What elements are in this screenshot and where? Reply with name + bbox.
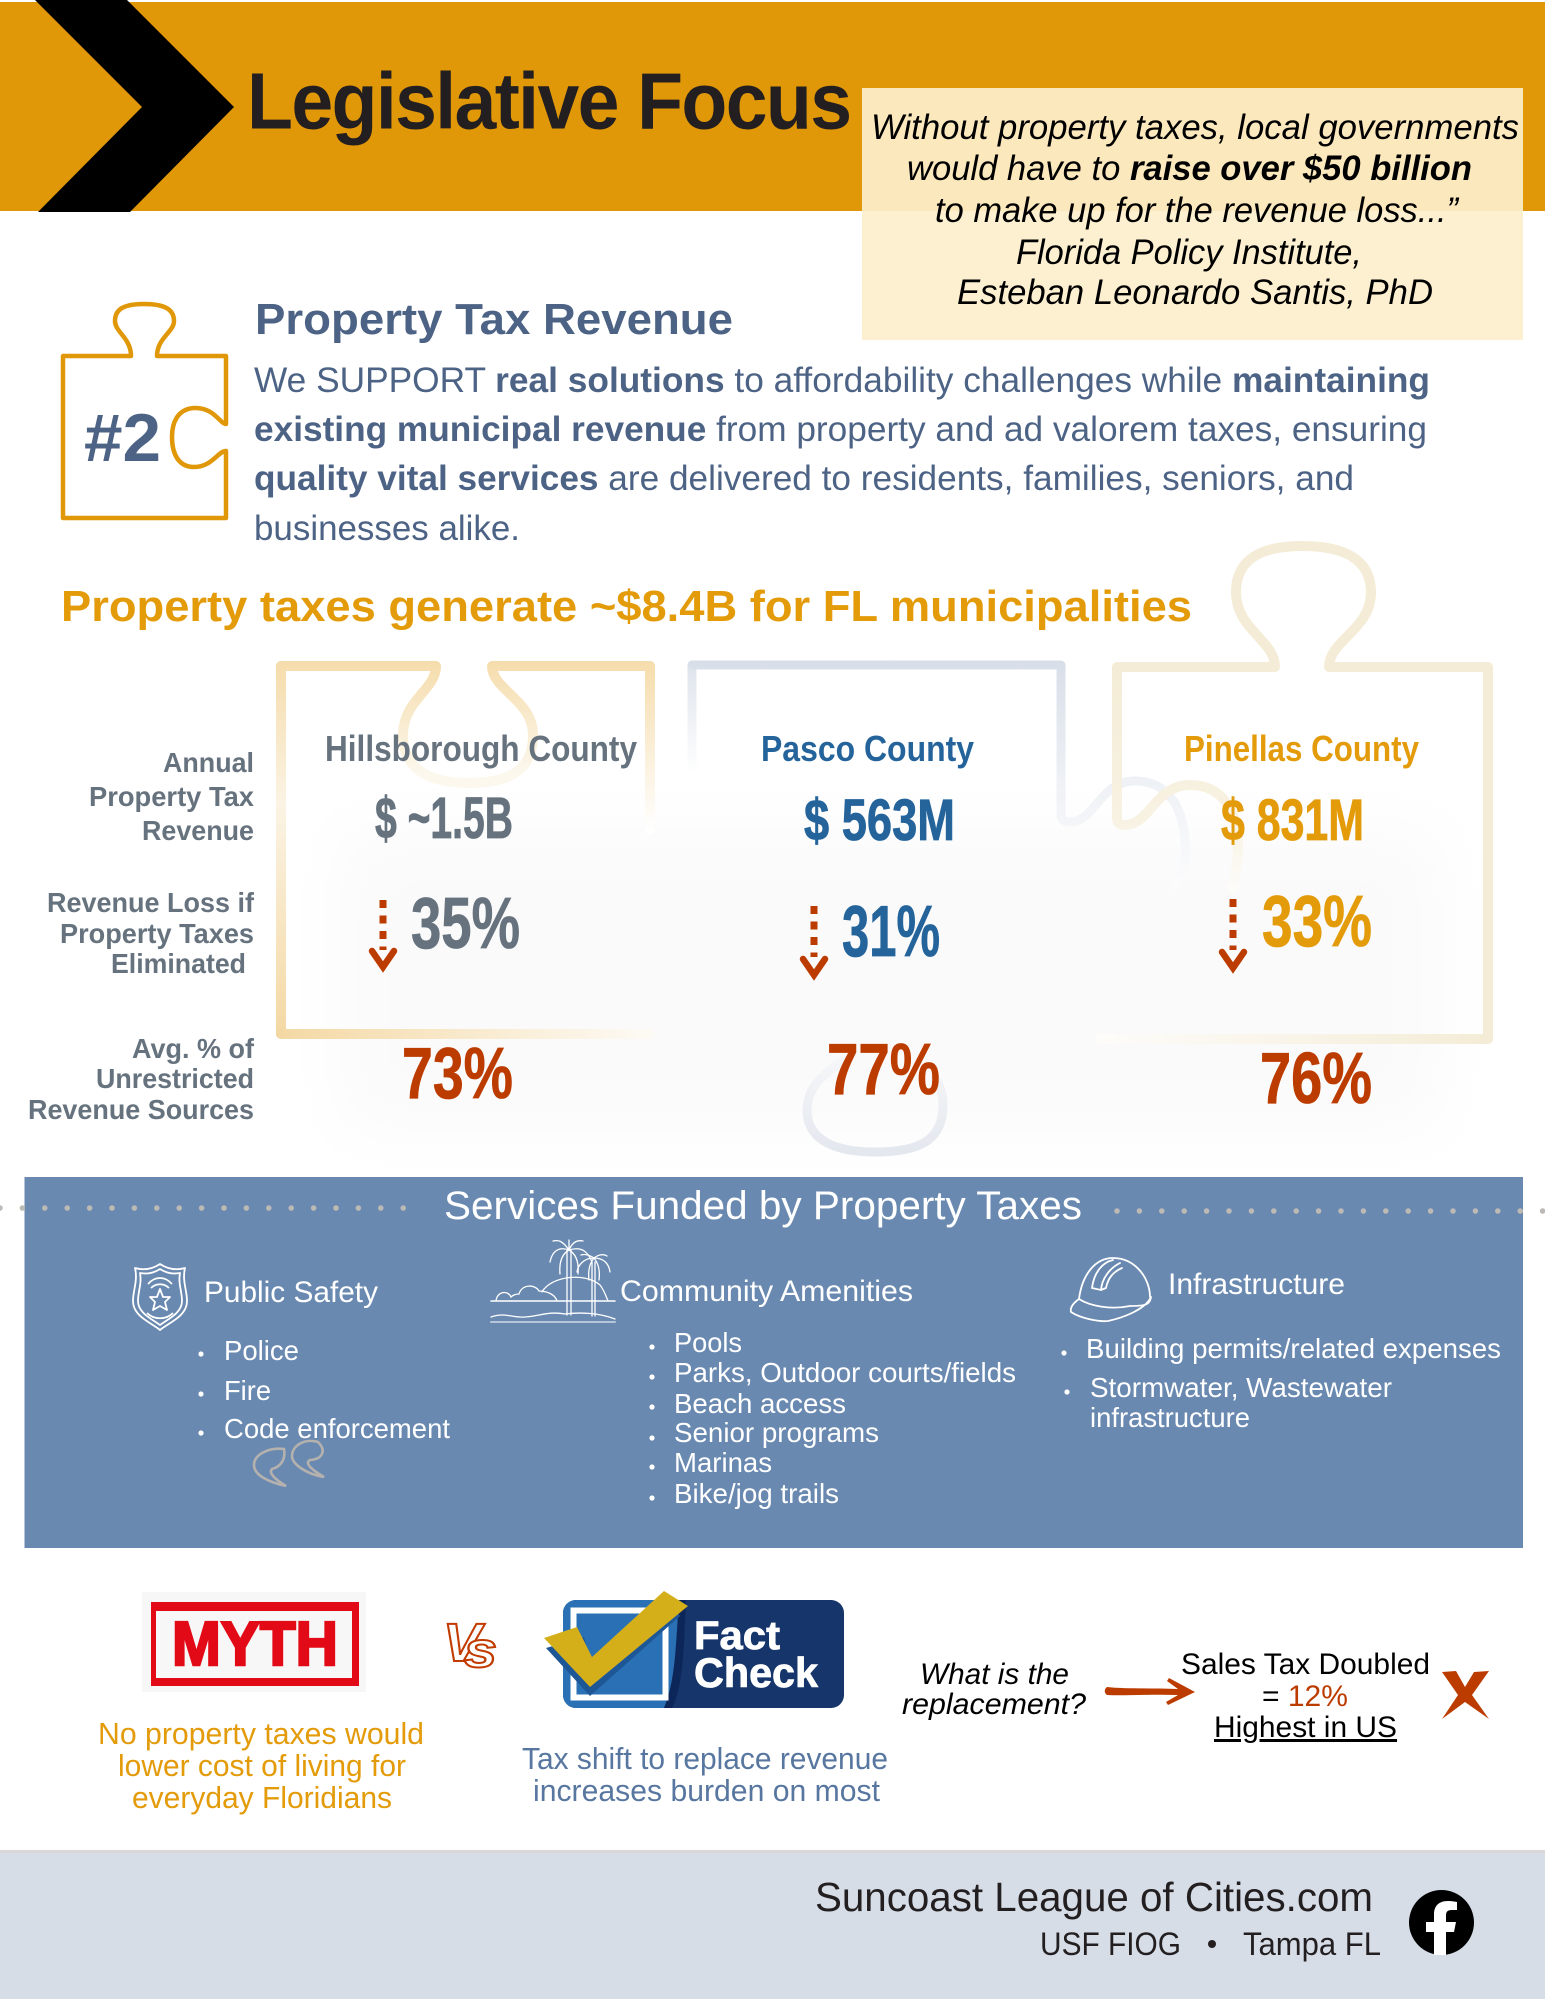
text block: support statement: quality vital services are delivered to residents, families, seniors, and <box>254 459 1354 498</box>
icon: gold check mark <box>544 1591 688 1687</box>
puzzle frame: Pasco <box>692 665 1185 1152</box>
icon: hard hat <box>1071 1258 1151 1321</box>
text: sales tax doubled: Sales Tax Doubled <box>1181 1648 1430 1681</box>
icon: police badge <box>133 1264 187 1330</box>
myth stamp: MYTH <box>172 1610 338 1679</box>
puzzle frame: Pinellas <box>1100 546 1488 1039</box>
list: community amenities: Senior programs <box>674 1417 879 1448</box>
text: myth caption: everyday Floridians <box>132 1780 392 1815</box>
list: infrastructure: Stormwater, Wastewater <box>1090 1372 1392 1403</box>
column: Hillsborough County <box>325 728 637 1114</box>
footer band <box>0 1850 1545 1999</box>
fact check badge <box>544 1591 844 1708</box>
column: Hillsborough County: $ ~1.5B <box>375 786 513 851</box>
callout: quote box: Without property taxes, local governments <box>871 108 1519 147</box>
column: Pasco County: $ 563M <box>804 788 955 853</box>
row labels: Revenue Sources <box>28 1094 254 1125</box>
puzzle frame: Hillsborough <box>281 666 650 1034</box>
text: myth caption: No property taxes would <box>98 1716 424 1751</box>
icon: facebook <box>1409 1890 1474 1955</box>
column: Pinellas County: $ 831M <box>1221 788 1364 853</box>
text: replacement question: What is the <box>920 1658 1069 1691</box>
text block: support statement: existing municipal revenue from property and ad valorem taxes, ensuring <box>254 410 1427 449</box>
list: public safety: Police <box>224 1335 299 1366</box>
text: sales tax doubled <box>1181 1648 1430 1744</box>
text: fact caption <box>522 1741 888 1808</box>
text: myth caption <box>98 1716 424 1815</box>
label: infrastructure: Infrastructure <box>1168 1268 1345 1301</box>
text: replacement question: replacement? <box>902 1688 1086 1721</box>
text block: support statement: businesses alike. <box>254 509 520 548</box>
label: community amenities: Community Amenities <box>620 1275 913 1308</box>
icon: down arrow <box>803 906 825 975</box>
callout: quote box: would have to raise over $50 billion <box>907 149 1472 188</box>
column: Pinellas County: 76% <box>1260 1039 1372 1119</box>
row labels <box>28 747 255 1125</box>
icon: down arrow <box>372 900 394 967</box>
heading: property taxes generate: Property taxes generate ~$8.4B for FL municipalities <box>61 582 1192 631</box>
list: infrastructure <box>1061 1333 1501 1433</box>
header banner <box>0 0 1545 212</box>
arrow: to sales tax <box>1105 1678 1195 1705</box>
text: location: USF FIOG <box>1040 1926 1181 1962</box>
column: Hillsborough County: 73% <box>402 1034 513 1114</box>
text block: support statement: We SUPPORT real solutions to affordability challenges while maintaining <box>254 361 1430 400</box>
text: location: Tampa FL <box>1243 1926 1381 1962</box>
row labels: Avg. % of <box>132 1033 255 1064</box>
row labels: Revenue <box>142 815 254 846</box>
row labels: Property Taxes <box>60 918 254 949</box>
list: infrastructure: infrastructure <box>1090 1402 1250 1433</box>
text: league name: Suncoast League of Cities.com <box>815 1874 1373 1920</box>
icon: puzzle piece #2 <box>63 304 226 518</box>
title: Legislative Focus <box>247 57 852 146</box>
text: fact caption: increases burden on most <box>533 1773 880 1808</box>
row labels: Eliminated <box>111 948 246 979</box>
label: public safety: Public Safety <box>204 1276 378 1309</box>
label: #2: #2 <box>84 400 161 476</box>
list: community amenities: Parks, Outdoor courts/fields <box>674 1357 1016 1388</box>
list: infrastructure: Building permits/related expenses <box>1086 1333 1501 1364</box>
row labels: Revenue Loss if <box>47 887 255 918</box>
column: Pasco County: 31% <box>842 892 940 972</box>
row labels: Annual <box>163 747 254 778</box>
list: community amenities: Pools <box>674 1327 742 1358</box>
text: fact caption: Tax shift to replace revenue <box>522 1741 888 1776</box>
list: public safety <box>198 1335 450 1444</box>
column: Pasco County <box>761 728 974 1110</box>
text: sales tax doubled: Highest in US <box>1214 1711 1397 1744</box>
vs label <box>443 1613 497 1678</box>
row labels: Unrestricted <box>96 1063 254 1094</box>
callout: quote box: to make up for the revenue loss...” <box>935 191 1459 230</box>
fact check badge: Check <box>694 1649 819 1696</box>
heading: property tax revenue: Property Tax Revenue <box>255 295 733 344</box>
icon: quotation marks <box>254 1441 324 1486</box>
heading: services funded: Services Funded by Property Taxes <box>444 1184 1082 1228</box>
list: public safety: Fire <box>224 1375 271 1406</box>
column: Pasco County: Pasco County <box>761 728 974 769</box>
text: sales tax doubled: = 12% <box>1262 1680 1348 1713</box>
panel: services funded <box>0 1177 1543 1548</box>
column: Pinellas County <box>1184 728 1419 1119</box>
text: myth caption: lower cost of living for <box>118 1748 406 1783</box>
column: Pinellas County: 33% <box>1262 882 1372 962</box>
text: location <box>1040 1926 1381 1962</box>
icon: red x <box>1442 1671 1489 1719</box>
myth stamp <box>142 1592 366 1692</box>
icon: palm beach <box>491 1240 615 1322</box>
list: public safety: Code enforcement <box>224 1413 450 1444</box>
vs label: V <box>443 1613 485 1673</box>
text: replacement question <box>902 1658 1086 1721</box>
icon: down arrow <box>1222 899 1244 968</box>
vs label: s <box>464 1622 497 1678</box>
column: Hillsborough County: Hillsborough County <box>325 728 637 769</box>
list: community amenities: Beach access <box>674 1388 846 1419</box>
icon: black chevron <box>35 0 234 212</box>
callout: quote box: Florida Policy Institute, <box>1016 233 1362 272</box>
column: Hillsborough County: 35% <box>411 884 520 964</box>
callout: quote box <box>862 88 1523 340</box>
column: Pinellas County: Pinellas County <box>1184 728 1419 769</box>
row labels: Property Tax <box>89 781 254 812</box>
column: Pasco County: 77% <box>827 1030 940 1110</box>
text block: support statement <box>254 361 1430 548</box>
fact check badge: Fact <box>694 1614 780 1658</box>
list: community amenities <box>649 1327 1016 1509</box>
list: community amenities: Bike/jog trails <box>674 1478 839 1509</box>
callout: quote box: Esteban Leonardo Santis, PhD <box>957 273 1433 312</box>
list: community amenities: Marinas <box>674 1447 772 1478</box>
